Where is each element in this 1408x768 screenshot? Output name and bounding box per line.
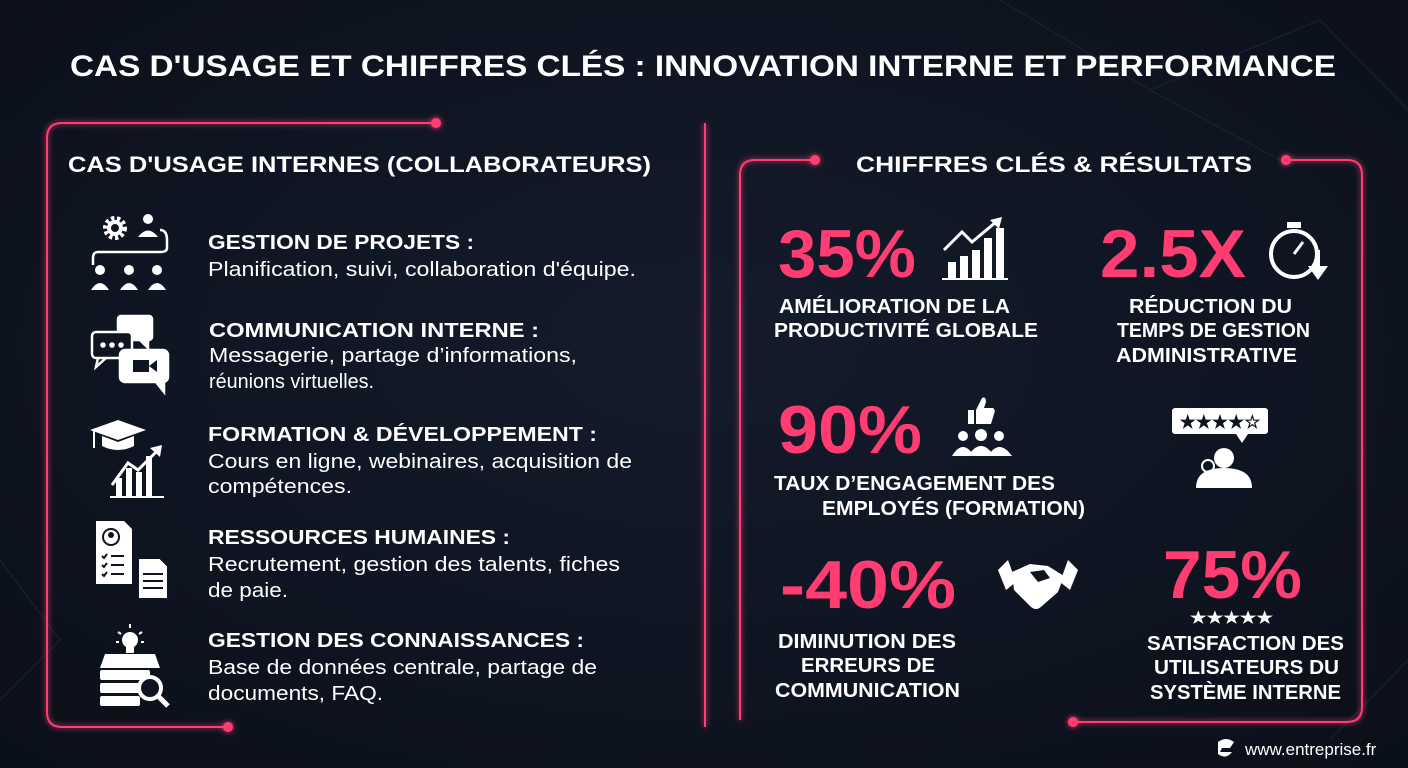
footer: logo and url: www.entreprise.fr bbox=[1244, 740, 1377, 759]
stat: -40%: DIMINUTION DES bbox=[778, 631, 956, 653]
stat: 90%: EMPLOYÉS (FORMATION) bbox=[822, 497, 1085, 520]
stat: 2.5X: 2.5X bbox=[1100, 216, 1246, 292]
text: communication interne bbox=[209, 320, 577, 393]
icon: rating feedback bbox=[1172, 408, 1268, 488]
text: gestion des connaissances: GESTION DES CONNAISSANCES : bbox=[208, 630, 584, 652]
stat: 2.5X bbox=[1100, 216, 1310, 367]
heading: left panel: CAS D'USAGE INTERNES (COLLABORATEURS) bbox=[68, 152, 651, 177]
heading: right panel: CHIFFRES CLÉS & RÉSULTATS bbox=[856, 152, 1252, 177]
icon: stopwatch bbox=[1271, 222, 1328, 280]
stat: 35%: AMÉLIORATION DE LA bbox=[779, 295, 1010, 318]
text: gestion de projets: Planification, suivi, collaboration d'équipe. bbox=[208, 259, 636, 281]
title: CAS D'USAGE ET CHIFFRES CLÉS : INNOVATION INTERNE ET PERFORMANCE bbox=[70, 49, 1336, 83]
stat: 2.5X: ADMINISTRATIVE bbox=[1116, 345, 1297, 367]
stat: 2.5X: RÉDUCTION DU bbox=[1129, 295, 1292, 318]
stat: -40%: COMMUNICATION bbox=[775, 680, 960, 702]
text: ressources humaines: de paie. bbox=[208, 580, 288, 602]
text: formation bbox=[208, 423, 632, 498]
stat: 90%: 90% bbox=[778, 392, 922, 468]
stat: 35%: 35% bbox=[778, 216, 916, 292]
stat: 2.5X: TEMPS DE GESTION bbox=[1117, 320, 1310, 342]
panel: left border bbox=[47, 119, 705, 731]
text: communication interne: COMMUNICATION INTERNE : bbox=[209, 320, 539, 342]
icon: rating feedback: ★★★★☆ bbox=[1180, 412, 1261, 432]
stat: 75%: SYSTÈME INTERNE bbox=[1150, 681, 1341, 704]
stat: 90%: TAUX D’ENGAGEMENT DES bbox=[774, 473, 1055, 495]
stat: 75%: SATISFACTION DES bbox=[1147, 633, 1344, 655]
icon: growth chart bbox=[942, 217, 1008, 279]
stat: -40%: -40% bbox=[780, 547, 956, 623]
stat: 75% bbox=[1147, 537, 1344, 704]
icon: ressources humaines bbox=[96, 521, 168, 599]
text: gestion de projets: GESTION DE PROJETS : bbox=[208, 232, 474, 254]
icon: handshake bbox=[998, 560, 1078, 609]
stat: 35%: PRODUCTIVITÉ GLOBALE bbox=[774, 319, 1038, 342]
stat: 35% bbox=[774, 216, 1038, 342]
text: formation: compétences. bbox=[208, 476, 352, 498]
text: gestion de projets bbox=[208, 232, 636, 281]
text: gestion des connaissances: documents, FAQ. bbox=[208, 683, 383, 705]
text: ressources humaines: RESSOURCES HUMAINES : bbox=[208, 527, 510, 549]
stat: -40% bbox=[775, 547, 960, 702]
icon: connaissances bbox=[100, 624, 168, 706]
text: gestion des connaissances: Base de données centrale, partage de bbox=[208, 657, 597, 679]
text: communication interne: Messagerie, partage d’informations, bbox=[209, 345, 577, 367]
text: formation: Cours en ligne, webinaires, acquisition de bbox=[208, 451, 632, 473]
icon: team thumbs up bbox=[952, 398, 1012, 456]
stat: -40%: ERREURS DE bbox=[801, 655, 935, 677]
stat: 75%: UTILISATEURS DU bbox=[1154, 657, 1339, 679]
icon: project management bbox=[91, 214, 167, 290]
text: communication interne: réunions virtuelles. bbox=[209, 371, 374, 393]
text: ressources humaines bbox=[208, 527, 620, 602]
icon: communication bbox=[92, 316, 168, 392]
text: ressources humaines: Recrutement, gestion des talents, fiches bbox=[208, 554, 620, 576]
text: gestion des connaissances bbox=[208, 630, 597, 705]
text: formation: FORMATION & DÉVELOPPEMENT : bbox=[208, 423, 597, 446]
stat: 90% bbox=[774, 392, 1085, 520]
stat: 75%: 75% bbox=[1163, 537, 1302, 613]
stat: 75%: ★★★★★ bbox=[1190, 610, 1274, 627]
panel: right border bbox=[740, 156, 1362, 726]
icon: formation bbox=[90, 420, 164, 497]
